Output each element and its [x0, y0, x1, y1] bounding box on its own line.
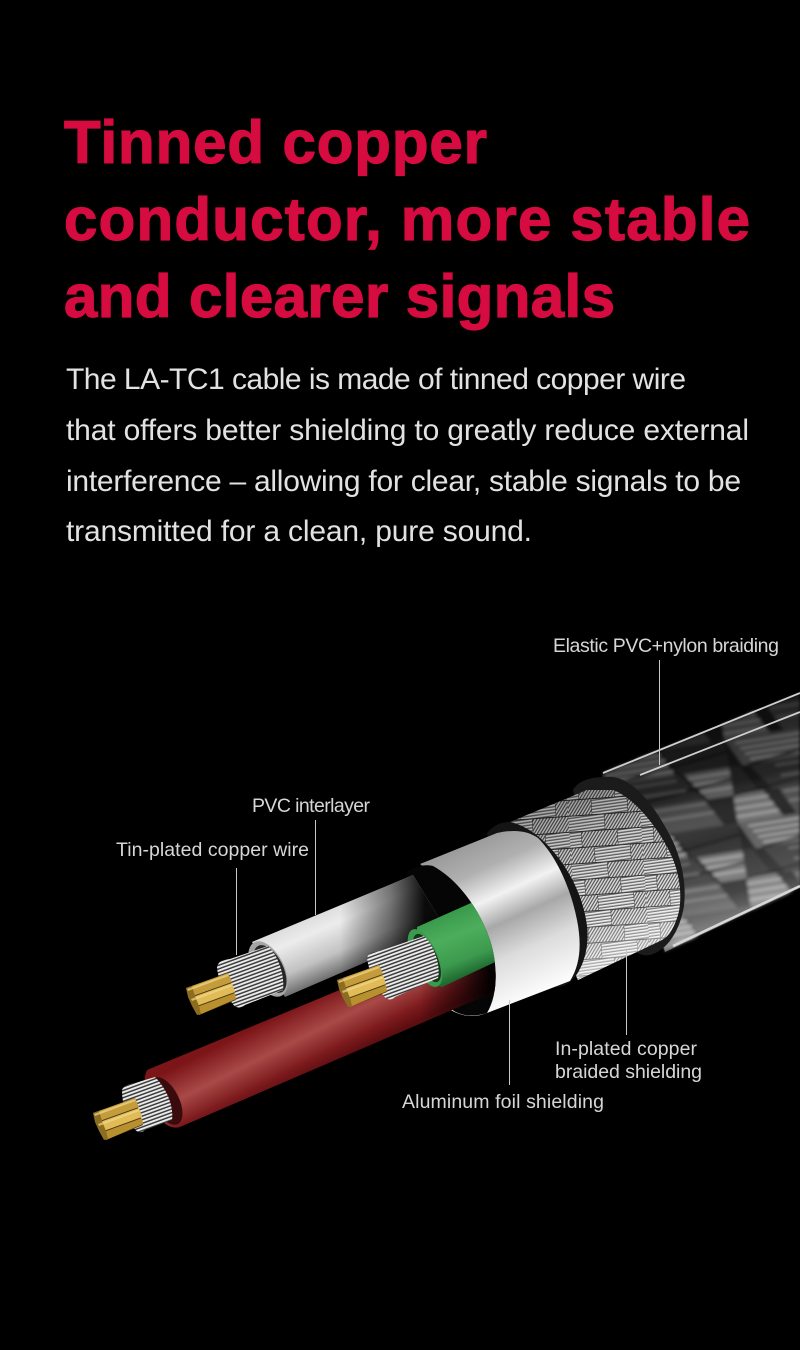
leader lines	[236, 660, 660, 1085]
body text	[66, 363, 749, 548]
callout labels: Aluminum foil shielding	[402, 1091, 604, 1113]
outer jacket end ring	[573, 777, 685, 955]
tinned copper braided shield	[510, 790, 680, 980]
body text: that offers better shielding to greatly reduce external	[66, 414, 749, 447]
callout labels: PVC interlayer	[252, 795, 370, 817]
callout labels: Elastic PVC+nylon braiding	[553, 635, 779, 657]
grey insulated wire	[248, 875, 438, 997]
title	[64, 109, 750, 330]
silver strands on red wire	[122, 1077, 172, 1132]
callout labels: Tin-plated copper wire	[116, 839, 309, 861]
title: Tinned copper	[64, 109, 487, 176]
gold core on grey wire	[186, 973, 236, 1015]
title: and clearer signals	[64, 263, 615, 330]
gold core on red wire	[93, 1098, 143, 1140]
body text: transmitted for a clean, pure sound.	[66, 515, 532, 548]
shield end dark ring	[487, 822, 588, 987]
silver strands on green wire	[367, 936, 439, 999]
callout labels	[116, 635, 779, 1113]
foil inner hollow	[407, 865, 496, 1016]
silver strands on grey wire	[217, 946, 283, 1007]
green insulated wire	[408, 902, 495, 987]
cable illustration	[93, 693, 800, 1140]
outer braiding	[603, 693, 800, 952]
body text: The LA-TC1 cable is made of tinned copper wire	[66, 363, 686, 396]
gold core on green wire	[337, 965, 387, 1007]
callout labels: In-plated copper	[555, 1038, 698, 1060]
red insulated wire	[144, 965, 496, 1128]
body text: interference – allowing for clear, stable signals to be	[66, 465, 741, 498]
callout labels: braided shielding	[555, 1061, 702, 1083]
title: conductor, more stable	[64, 186, 750, 253]
aluminum foil shielding	[420, 831, 580, 1016]
